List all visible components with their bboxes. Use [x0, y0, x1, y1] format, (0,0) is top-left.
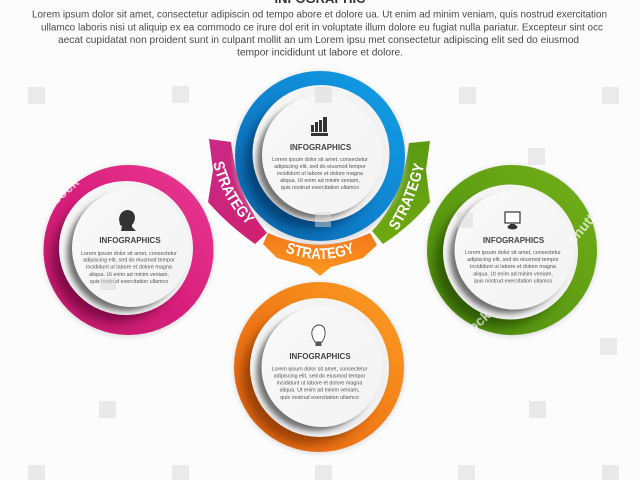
- heading: INFOGRAPHICS: [99, 236, 161, 245]
- panel: blue circle: [233, 71, 407, 245]
- body text: adipiscing elit, sed do eiusmod tempor: [274, 164, 366, 170]
- intro paragraph: Lorem ipsum dolor sit amet, consectetur adipiscin od tempo abore et dolore ua. Ut enim ad minim veniam, quis nostrud exercitation: [32, 10, 607, 20]
- body text: incididunt ut labore et dolore magna: [86, 265, 172, 271]
- body text: quis nostrud exercitation ullamco: [280, 395, 359, 401]
- body text: [272, 157, 368, 191]
- icon: bar chart: [311, 117, 328, 136]
- body text: adipiscing elit, sed do eiusmod tempor: [83, 258, 175, 264]
- icon: light bulb: [312, 325, 325, 346]
- body text: adipiscing elit, sed do eiusmod tempor: [274, 374, 366, 380]
- ribbon: orange strategy: STRATEGY: [286, 242, 352, 260]
- icon: head: [119, 210, 136, 231]
- body text: quis nostrud exercitation ullamco: [474, 278, 552, 284]
- body text: quis nostrud exercitation ullamco: [90, 279, 168, 285]
- heading: INFOGRAPHICS: [290, 143, 352, 152]
- ribbon: orange strategy: [263, 233, 377, 276]
- heading: INFOGRAPHICS: [289, 352, 351, 361]
- watermark text: tock: [461, 307, 494, 338]
- body text: aliqua. Ut enim ad minim veniam,: [280, 388, 360, 394]
- watermark squares: [28, 86, 619, 480]
- body text: Lorem ipsum dolor sit amet, consectetur: [465, 250, 561, 256]
- body text: [465, 250, 561, 284]
- intro paragraph: tempor incididunt ut labore et dolore.: [237, 48, 403, 58]
- watermark text: [47, 174, 599, 338]
- body text: Lorem ipsum dolor sit amet, consectetur: [272, 366, 368, 372]
- body text: incididunt ut labore et dolore magna: [277, 171, 363, 177]
- ribbon: pink strategy: STRATEGY: [214, 162, 256, 223]
- intro paragraph: aecat cupidatat non proident sunt in culpant mollit an um Lorem ipsu met consectetur adipiscing elit sed do eiusmod: [58, 35, 579, 46]
- intro paragraph: ullamco laboris nisi ut aliquip ex ea commodo ce irure dol erit in voluptate illum dolore eu fugiat nulla pariatur. Excepteur sint occ: [41, 22, 603, 34]
- watermark text: shutt: [564, 210, 599, 247]
- body text: incididunt ut labore et dolore magna: [470, 264, 556, 270]
- panel: pink circle: [42, 165, 214, 337]
- body text: Lorem ipsum dolor sit amet, consectetur: [272, 157, 368, 163]
- icon: monitor: [505, 212, 520, 230]
- body text: aliqua. Ut enim ad minim veniam,: [89, 272, 169, 278]
- body text: incididunt ut labore et dolore magna: [277, 380, 362, 386]
- body text: quis nostrud exercitation ullamco: [281, 185, 359, 191]
- body text: aliqua. Ut enim ad minim veniam,: [473, 272, 553, 278]
- body text: Lorem ipsum dolor sit amet, consectetur: [81, 251, 177, 257]
- heading: INFOGRAPHICS: [483, 236, 545, 245]
- panel: green circle: [426, 165, 598, 337]
- body text: aliqua. Ut enim ad minim veniam,: [280, 178, 360, 184]
- ribbon: pink strategy: [208, 139, 267, 244]
- body text: [272, 366, 368, 401]
- ribbon: green strategy: STRATEGY: [389, 162, 424, 230]
- intro paragraph: [32, 10, 607, 58]
- panel: orange circle: [233, 282, 405, 454]
- watermark text: sock: [47, 174, 82, 207]
- ribbon: green strategy: [372, 141, 430, 244]
- body text: adipiscing elit, sed do eiusmod tempor: [467, 257, 559, 263]
- body text: [81, 251, 177, 285]
